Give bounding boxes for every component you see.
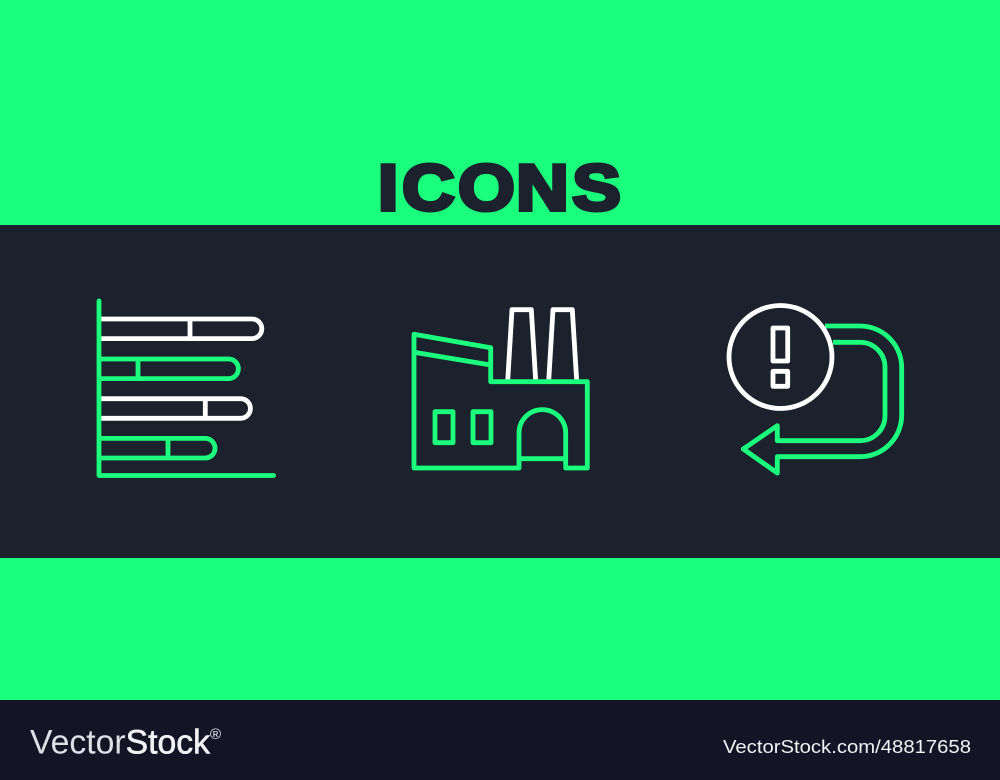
warning circle [729,306,832,408]
icon: warning with return arrow [729,306,902,473]
factory building outline [414,334,587,468]
factory windows [435,412,491,443]
footer logo [30,724,221,762]
dark icon panel [0,225,1000,558]
bar 4 [101,438,215,458]
lower green band [0,558,1000,700]
wordmark: VectorStock [30,724,211,762]
chart axes [99,301,274,476]
footer bar [0,700,1000,780]
registered mark: ® [210,726,221,743]
exclamation mark [773,328,788,386]
icon: factory [414,310,587,468]
smokestacks [508,310,577,381]
footer image id: VectorStock.com/48817658 [723,736,971,757]
title: ICONS [378,152,621,224]
icon: horizontal bar chart [99,301,274,476]
bar 1 [101,319,262,339]
bar 2 [101,359,238,379]
top green band [0,0,1000,225]
bar 3 [101,399,250,418]
return arrow [743,326,902,473]
